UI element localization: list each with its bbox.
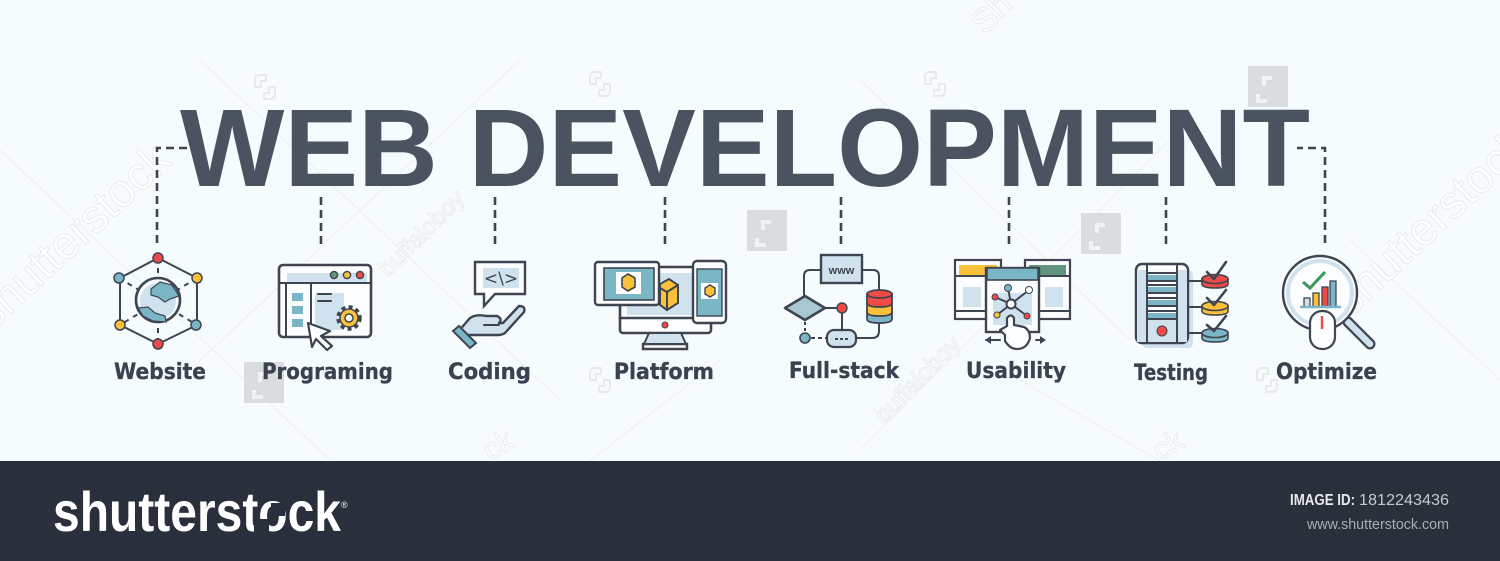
image id <box>1290 492 1449 509</box>
label: Website: Website <box>114 359 206 385</box>
icon: optimize magnifier <box>1283 256 1370 349</box>
label: Coding: Coding <box>448 359 531 385</box>
label: Optimize: Optimize <box>1276 359 1377 385</box>
icon: coding hand with speech bubble <box>453 262 525 348</box>
shutterstock logo: shutterstock <box>53 480 342 543</box>
label: Usability: Usability <box>966 358 1066 384</box>
icon: platform devices <box>595 261 726 349</box>
icon: full-stack flow diagram <box>785 255 892 347</box>
icon: website network globe <box>114 253 202 349</box>
footer bar <box>0 461 1500 561</box>
watermarks: buffaloboy <box>373 185 470 282</box>
icon: coding hand with speech bubble: <\> <box>484 269 518 289</box>
website url: www.shutterstock.com <box>1306 517 1449 533</box>
footer bar: ® <box>341 500 348 510</box>
label: Platform: Platform <box>614 359 714 385</box>
label: Testing: Testing <box>1134 360 1208 386</box>
icon: programing window <box>279 265 371 350</box>
icon: full-stack flow diagram: www <box>828 265 855 277</box>
label: Programing: Programing <box>262 359 393 385</box>
icon: testing server <box>1136 262 1228 348</box>
label: Full-stack: Full-stack <box>789 358 900 384</box>
image id: IMAGE ID: <box>1290 492 1355 509</box>
watermarks: buffaloboy <box>869 331 966 428</box>
title: WEB DEVELOPMENT <box>180 87 1310 210</box>
image id: 1812243436 <box>1359 492 1449 509</box>
icon: usability windows and touch <box>955 260 1070 349</box>
watermarks: ck <box>477 423 520 467</box>
dashed connectors <box>157 148 1325 245</box>
watermarks: ck <box>1147 423 1190 467</box>
